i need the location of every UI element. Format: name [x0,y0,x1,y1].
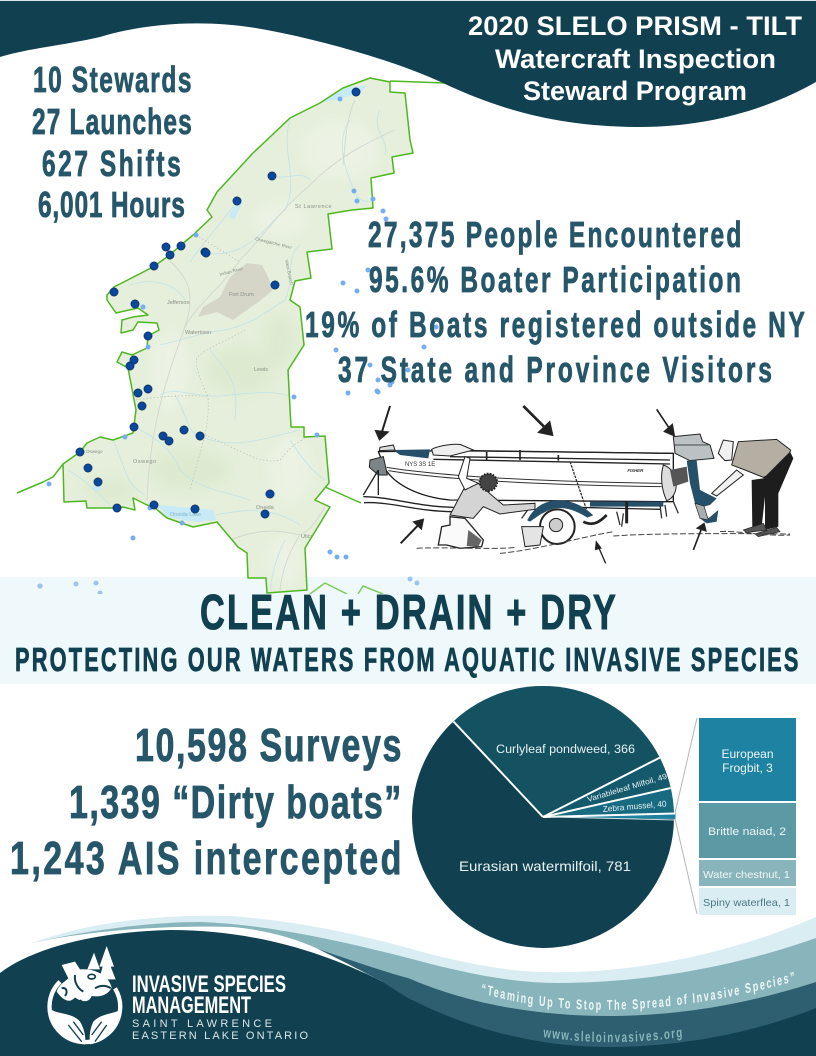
trailer wheel and fender [540,509,575,544]
program stats: people reached: 37 State and Province Visitors [338,349,772,390]
title [468,11,803,106]
title: 2020 SLELO PRISM - TILT [468,11,803,41]
fish [57,962,112,1001]
title: Steward Program [523,76,747,106]
pie chart: aquatic invasive species intercepted [412,686,676,948]
trees [99,946,116,979]
boat hull [378,451,673,502]
footer wave [0,916,816,1056]
pale wave layer [32,916,816,1056]
ring [50,982,120,1042]
map: program region with launch sites [0,70,445,600]
header banner [0,1,816,127]
out of region visitor dots [37,96,439,596]
boat name: NYS 3S 1E [405,462,435,468]
organization name: INVASIVE SPECIES [132,971,286,998]
inspection arrows [375,406,707,563]
ground shading [417,531,790,553]
box: Spiny waterflea: Spiny waterflea, 1 [703,897,790,909]
map boundary [17,78,445,594]
survey stats [10,719,401,884]
program stats: people reached [305,214,805,390]
organization name: SAINT LAWRENCE [132,1018,272,1030]
organization name: MANAGEMENT [132,992,251,1019]
box: Water chestnut [699,860,796,886]
pie labels: Variableleaf Milfoil, 49 [586,772,668,804]
map place labels: Oswego [133,459,157,465]
map place labels: Lewis [254,367,268,373]
program stats: staffing: 27 Launches [32,101,192,142]
slogan: clean drain dry: CLEAN + DRAIN + DRY [200,585,616,639]
box: European Frogbit: Frogbit, 3 [722,761,773,775]
dark base layer [0,930,816,1056]
slice: Curlyleaf pondweed [453,686,660,817]
kneeling person [450,483,535,518]
website on curve: www.sleloinvasives.org [544,1030,682,1042]
program stats: staffing: 6,001 Hours [38,184,185,225]
map place labels: West Branch [284,259,294,286]
survey stats: 1,243 AIS intercepted [10,832,401,884]
box: Water chestnut: Water chestnut, 1 [703,869,790,881]
illustration: people inspecting a boat on a trailer: FISHER [627,468,644,473]
map place labels: Oswego [86,449,103,454]
Oneida Lake and other water [92,85,367,522]
program stats: staffing: 627 Shifts [42,143,181,184]
box: European Frogbit [699,718,796,801]
county lines [136,236,307,488]
box: Brittle naiad [699,803,796,858]
hands [50,1008,85,1044]
slice: Zebra mussel [543,788,674,817]
organization name: EASTERN LAKE ONTARIO [132,1030,308,1042]
box: European Frogbit: European [721,747,774,761]
map land fill [64,78,412,592]
program stats: people reached: 19% of Boats registered outside NY [305,304,805,345]
box: Spiny waterflea [699,888,796,915]
program stats: people reached: 27,375 People Encountered [368,214,741,255]
illustration: people inspecting a boat on a trailer [363,406,793,563]
program stats: staffing: 10 Stewards [33,59,191,100]
box: Brittle naiad: Brittle naiad, 2 [708,826,786,838]
map place labels: Jefferson [167,300,190,306]
program stats: people reached: 95.6% Boater Participation [369,259,741,300]
light teal wave layer [32,922,816,1056]
map place labels: Watertown [185,330,211,336]
map place labels: Oneida Lake [170,512,201,518]
icon: organization logo with fish, trees and hands [50,946,121,1044]
slice: Variableleaf Milfoil [543,758,671,817]
map place labels [86,204,332,540]
rivers [68,110,386,590]
launch site dots [76,88,360,518]
bucket [522,527,543,547]
breakout chart: other species [675,718,796,915]
Fort Drum area [198,263,273,320]
map place labels: Oneida [256,505,275,511]
standing person [732,439,791,477]
pie labels: Curlyleaf pondweed, 366 [496,744,635,756]
roads [147,100,395,590]
white sliver [0,927,383,1056]
organization name [132,971,308,1042]
map place labels: Fort Drum [229,292,254,298]
outboard motor [673,434,714,461]
slogan subtitle: PROTECTING OUR WATERS FROM AQUATIC INVASIVE SPECIES [15,641,798,678]
map place labels: Oswegatchie River [255,236,293,250]
band: slogan background [0,577,816,684]
slice: Eurasian watermilfoil [412,721,674,948]
survey stats: 1,339 “Dirty boats” [69,776,401,828]
title: Watercraft Inspection [495,44,776,74]
program stats: staffing [32,59,192,225]
weeds [522,502,678,527]
slice: other species [543,813,676,819]
tagline on curve: “Teaming Up To Stop The Spread of Invasive Species” [482,972,794,1013]
website on curve [544,1030,682,1042]
trailer [363,470,453,512]
survey stats: 10,598 Surveys [135,719,401,771]
pie labels: Eurasian watermilfoil, 781 [459,858,631,874]
pie labels [459,744,668,874]
background strip [0,0,816,1]
map place labels: Indian River [219,266,244,277]
map place labels: Utica [301,534,314,540]
map place labels: St Lawrence [295,204,332,210]
pie labels: Zebra mussel, 40 [602,798,667,814]
mid teal wave layer [318,949,816,1056]
